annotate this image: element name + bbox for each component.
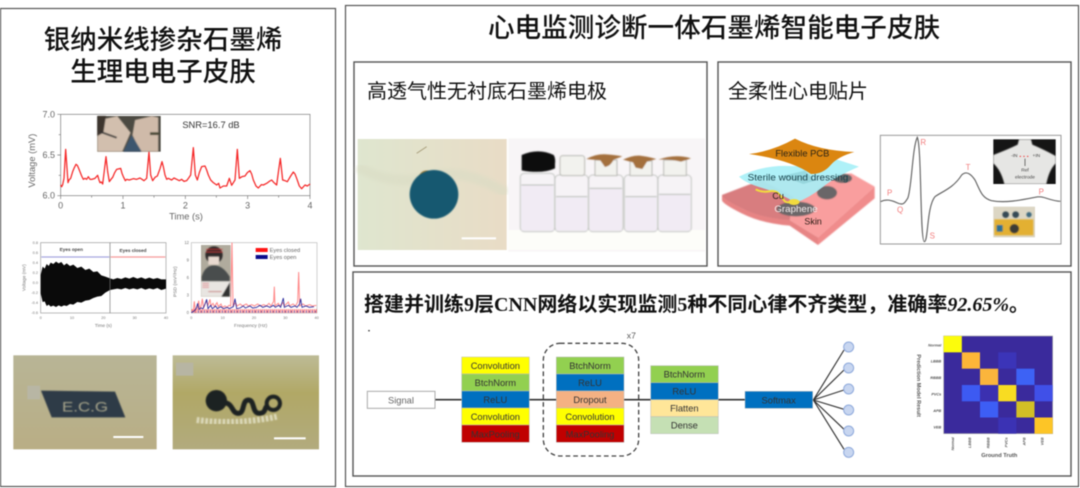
- layer: sterile wound dressing: [739, 159, 859, 203]
- chart: eyes open and closed voltage: -0.4: [31, 301, 39, 305]
- chart: power spectral density: [172, 240, 319, 329]
- chart: ECG voltage trace: 1: [120, 200, 125, 210]
- block: repeated stack: Dropout: [573, 395, 607, 405]
- heading: left panel title: [44, 25, 282, 87]
- block: repeated stack: Convolution: [565, 412, 615, 422]
- chart: confusion matrix: Prediction Model Result: [915, 354, 921, 417]
- chart: confusion matrix: Normal: [951, 436, 955, 451]
- block: final stack: [651, 366, 718, 434]
- panel: fully flexible ECG patch: [718, 62, 1071, 266]
- block: first convolution stack: ReLU: [483, 395, 508, 405]
- chart: confusion matrix: PVCs: [1004, 437, 1008, 447]
- chart: eyes open and closed voltage: Eyes closed: [120, 248, 147, 253]
- panel: silver nanowire graphene electronic skin: [0, 8, 336, 486]
- chart: confusion matrix: LBBB: [968, 437, 972, 448]
- chart: power spectral density: 20: [252, 316, 256, 320]
- chart: eyes open and closed voltage: 0.0: [33, 281, 38, 285]
- chart: eyes open and closed voltage: Voltage (mV): [22, 264, 27, 291]
- chart: ECG waveform PQRST: S: [930, 232, 935, 241]
- chart: eyes open and closed voltage: 40: [164, 316, 168, 320]
- inset: chest electrode placement: electrode: [1015, 175, 1035, 181]
- chart: ECG waveform PQRST: P: [1039, 188, 1044, 197]
- inset: patch device photo: [993, 207, 1035, 237]
- chart: confusion matrix: Ground Truth: [981, 453, 1018, 459]
- heading: electrode subpanel: 高透气性无衬底石墨烯电极: [367, 80, 607, 103]
- panel: breathable substrate-free graphene electrode: [354, 62, 707, 266]
- chart: ECG voltage trace: 6.0: [42, 191, 55, 201]
- block: repeated stack: BtchNorm: [569, 361, 611, 371]
- layer: flexible PCB: [749, 139, 854, 174]
- photo: ECG printed electrode on skin: [13, 355, 157, 449]
- chart: power spectral density: 0: [187, 310, 190, 315]
- block: final stack: ReLU: [672, 387, 697, 397]
- chart: eyes open and closed voltage: [22, 241, 168, 328]
- chart: confusion matrix: RBBB: [986, 437, 990, 448]
- panel: nine-layer CNN arrhythmia classification: [353, 272, 1071, 476]
- chart: power spectral density: 30: [283, 316, 287, 320]
- block: first convolution stack: MaxPooling: [471, 429, 520, 439]
- block: final stack: BtchNorm: [664, 370, 705, 380]
- chart: ECG voltage trace: 6.5: [42, 150, 55, 160]
- chart: eyes open and closed voltage: 10: [70, 316, 74, 320]
- photo: five glass vials: [508, 138, 705, 252]
- heading: CNN summary sentence: 搭建并训练9层CNN网络以实现监测5种不同心律不齐类型，准确率92.65%。: [364, 292, 1029, 316]
- legend: eyes closed and eyes open: [256, 248, 300, 261]
- block: repeated stack: [556, 357, 624, 442]
- chart: eyes open and closed voltage: 0: [40, 316, 42, 320]
- block: first convolution stack: Convolution: [471, 412, 520, 422]
- diagram: CNN architecture: [367, 330, 854, 457]
- chart: ECG waveform PQRST: R: [920, 138, 926, 147]
- chart: confusion matrix: VEB: [1041, 437, 1045, 445]
- block: first convolution stack: BtchNorm: [475, 378, 516, 388]
- chart: eyes open and closed voltage: 0.8: [33, 241, 38, 245]
- diagram: layered patch structure: Skin: [804, 217, 822, 227]
- chart: confusion matrix: Normal: [928, 343, 942, 347]
- chart: confusion matrix: PVCs: [931, 392, 941, 396]
- legend: eyes closed and eyes open: Eyes open: [270, 255, 296, 261]
- photo: ECG printed electrode on skin: E.C.G: [62, 398, 108, 414]
- chart: power spectral density: 0: [190, 316, 192, 320]
- diagram: layered patch structure: Graphene: [774, 204, 818, 214]
- chart: power spectral density: PSD (mV²/Hz): [172, 266, 178, 297]
- chart: confusion matrix: [915, 336, 1053, 459]
- chart: ECG voltage trace: 3: [245, 200, 250, 210]
- layer: sterile wound dressing: Sterile wound dressing: [748, 172, 848, 182]
- chart: confusion matrix: APB: [932, 409, 942, 413]
- repeat frame: x7: x7: [627, 331, 636, 341]
- chart: eyes open and closed voltage: 0.2: [33, 271, 38, 275]
- chart: eyes open and closed voltage: 0.6: [33, 251, 38, 255]
- photo inset: person with EEG electrodes: [201, 245, 231, 297]
- chart: ECG waveform PQRST: Q: [897, 206, 903, 215]
- chart: confusion matrix: VEB: [933, 426, 942, 430]
- chart: ECG voltage trace: [27, 109, 312, 221]
- chart: confusion matrix: RBBB: [930, 376, 942, 380]
- chart: power spectral density: 10: [221, 316, 225, 320]
- chart: eyes open and closed voltage: Eyes open: [60, 247, 83, 252]
- inset: chest electrode placement: -IN: [1011, 153, 1018, 159]
- chart: confusion matrix: APB: [1022, 437, 1026, 446]
- chart: ECG voltage trace: 2: [183, 200, 188, 210]
- photo: graphene electrode on skin: [358, 139, 507, 250]
- block: first convolution stack: Convolution: [471, 361, 520, 371]
- chart: eyes open and closed voltage: 0.4: [33, 261, 39, 265]
- panel: integrated ECG monitoring and diagnosis: [346, 6, 1078, 486]
- arrows and output nodes: [813, 342, 854, 457]
- block: final stack: Dense: [671, 421, 698, 431]
- block: final stack: Flatten: [670, 404, 699, 414]
- chart: ECG voltage trace: 4: [307, 200, 312, 210]
- chart: eyes open and closed voltage: Time (s): [95, 323, 112, 328]
- chart: power spectral density: 9: [187, 257, 190, 262]
- chart: eyes open and closed voltage: -0.6: [31, 311, 38, 315]
- inset: chest electrode placement: +IN: [1033, 153, 1041, 159]
- chart: eyes open and closed voltage: -0.2: [31, 291, 38, 295]
- chart: ECG voltage trace: 0: [58, 200, 63, 210]
- chart: ECG voltage trace: 7.0: [42, 109, 55, 119]
- chart: power spectral density: 6: [187, 275, 190, 280]
- photo inset: hands with electrodes: [97, 116, 161, 152]
- block: softmax: Softmax: [762, 395, 796, 405]
- block: repeated stack: ReLU: [578, 378, 602, 388]
- heading: left panel title: 银纳米线掺杂石墨烯: [44, 25, 282, 55]
- block: signal input: Signal: [388, 395, 414, 405]
- chart: ECG waveform PQRST: [880, 135, 1061, 244]
- layer: flexible PCB: Flexible PCB: [775, 149, 829, 159]
- copper trace: [756, 189, 794, 202]
- chart: confusion matrix: LBBB: [931, 360, 942, 364]
- block: signal input: [367, 391, 435, 408]
- annotation: SNR value: SNR=16.7 dB: [182, 120, 240, 130]
- chart: ECG voltage trace: Voltage (mV): [27, 134, 37, 188]
- heading: right panel title: 心电监测诊断一体石墨烯智能电子皮肤: [488, 13, 940, 43]
- chart: power spectral density: 12: [184, 240, 190, 245]
- diagram: layered patch structure: Cu: [772, 191, 784, 201]
- block: first convolution stack: [462, 357, 529, 442]
- chart: eyes open and closed voltage: 20: [101, 316, 105, 320]
- heading: left panel title: 生理电电子皮肤: [70, 57, 256, 87]
- legend: eyes closed and eyes open: Eyes closed: [270, 248, 300, 254]
- photo: serpentine electrode on skin: [173, 355, 319, 449]
- chart: ECG waveform PQRST: P: [887, 188, 892, 197]
- layer: skin: [722, 173, 875, 245]
- block: softmax: [745, 391, 813, 408]
- chart: eyes open and closed voltage: 30: [133, 316, 137, 320]
- block: repeated stack: MaxPooling: [566, 429, 614, 439]
- chart: ECG voltage trace: Time (s): [169, 211, 203, 221]
- heading: patch subpanel: 全柔性心电贴片: [728, 80, 868, 103]
- inset: chest electrode placement: [993, 139, 1056, 184]
- chart: ECG waveform PQRST: T: [966, 163, 971, 172]
- repeat frame: x7: [543, 331, 639, 456]
- chart: power spectral density: Frequency (Hz): [234, 323, 268, 329]
- inset: chest electrode placement: Ref: [1021, 168, 1029, 174]
- diagram: layered patch structure: [722, 139, 875, 245]
- chart: power spectral density: 3: [187, 292, 190, 297]
- chart: power spectral density: 40: [315, 316, 319, 320]
